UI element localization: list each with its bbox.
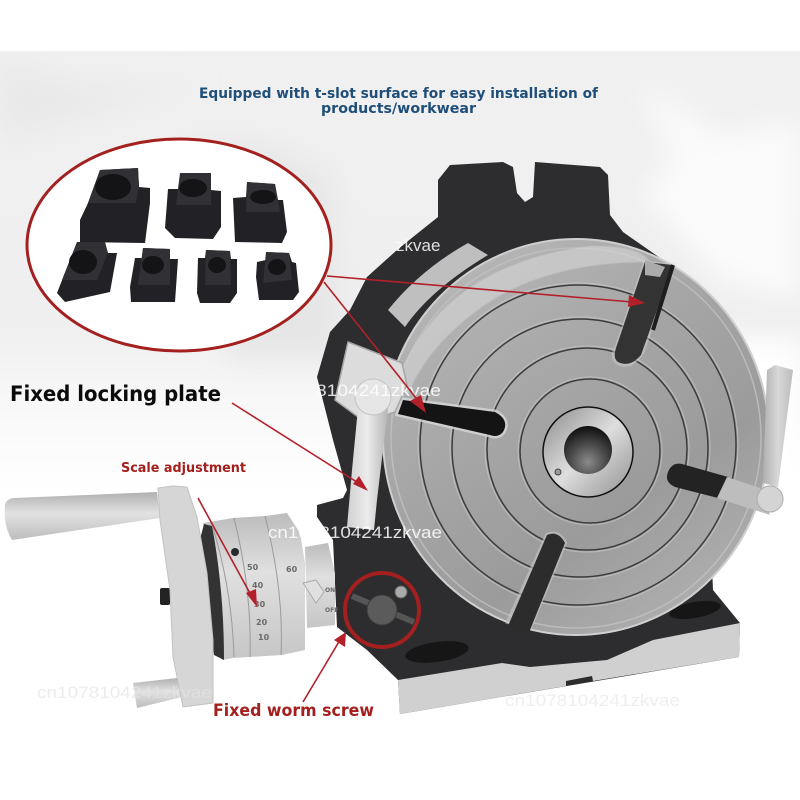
arrow: locking plate [232,403,368,491]
label: fixed worm screw: Fixed worm screw [213,701,374,721]
t-nut 5 [130,248,178,302]
t-nut 1 [80,168,150,243]
rotary table assembly [5,162,793,714]
arrow: t-nuts to left slot [324,282,426,413]
watermarks: cn1078104241zkvae [37,683,212,702]
t-slot top [613,260,673,365]
fixed locking plate clamp [335,342,407,422]
clamp peg vertical [763,365,793,487]
title [199,86,599,117]
watermarks: zkvae [396,236,440,255]
drum scale numbers: OFF [325,607,338,614]
t-slot left [398,400,505,436]
small set screw [395,586,407,598]
arrow: scale adjustment [198,498,257,607]
t-nut 4 [57,242,117,302]
worm screw knob [367,595,397,625]
dark hub behind wheel [198,524,224,660]
arrow: t-nuts to top slot [327,276,645,307]
side gear housing [305,543,335,628]
small lever knob [303,580,324,603]
lower grip [133,678,182,708]
table disc [383,239,769,635]
drum scale numbers: 60 [286,565,298,574]
watermarks: cn1078104241zkvae [505,691,680,710]
title: products/workwear [321,101,476,117]
center bore [564,426,612,474]
drum scale numbers: 40 [252,581,264,590]
handle [5,492,160,540]
callout circle: t-slot nuts [27,139,331,351]
center hub [543,407,633,497]
graduated drum [203,513,305,660]
drum dividing lines [213,516,281,657]
scale plate [388,243,488,327]
drum scale numbers [247,563,338,642]
t-nut 7 [256,252,299,300]
drum scale numbers: 50 [247,563,259,572]
worm screw highlight circle [345,573,419,647]
worm screw bar [352,596,414,622]
drum scale numbers: 30 [254,600,266,609]
table grooves [420,285,736,605]
groove highlights [418,283,738,607]
drum scale numbers: ON [325,587,335,594]
watermarks: 8104241zkvae [316,381,441,400]
t-nut 3 [233,182,287,243]
t-nut 6 [197,250,237,303]
drum scale numbers: 10 [258,633,270,642]
hub pin [555,469,561,475]
cast iron body [317,162,745,714]
table sheen [395,246,650,395]
clamp peg cap [757,486,783,512]
title: Equipped with t-slot surface for easy installation of [199,86,599,102]
watermarks: cn1078104241zkvae [268,523,442,542]
drum scale numbers: 20 [256,618,268,627]
t-slot bottom [508,534,565,635]
watermarks: cn10781 [262,236,327,255]
lever boss [355,379,391,415]
base front edge [398,623,740,714]
watermarks [37,236,680,710]
locking lever [347,408,388,530]
t-nut 2 [165,173,221,239]
base mounting slots [404,598,722,666]
table rim [391,248,761,628]
label: scale adjustment: Scale adjustment [121,461,246,476]
hand wheel [158,486,213,707]
label: fixed locking plate: Fixed locking plate [10,382,221,406]
pin on wheel [160,588,170,605]
t-slot right [667,464,770,515]
drum pin [231,548,239,556]
arrow: worm screw [303,632,346,702]
